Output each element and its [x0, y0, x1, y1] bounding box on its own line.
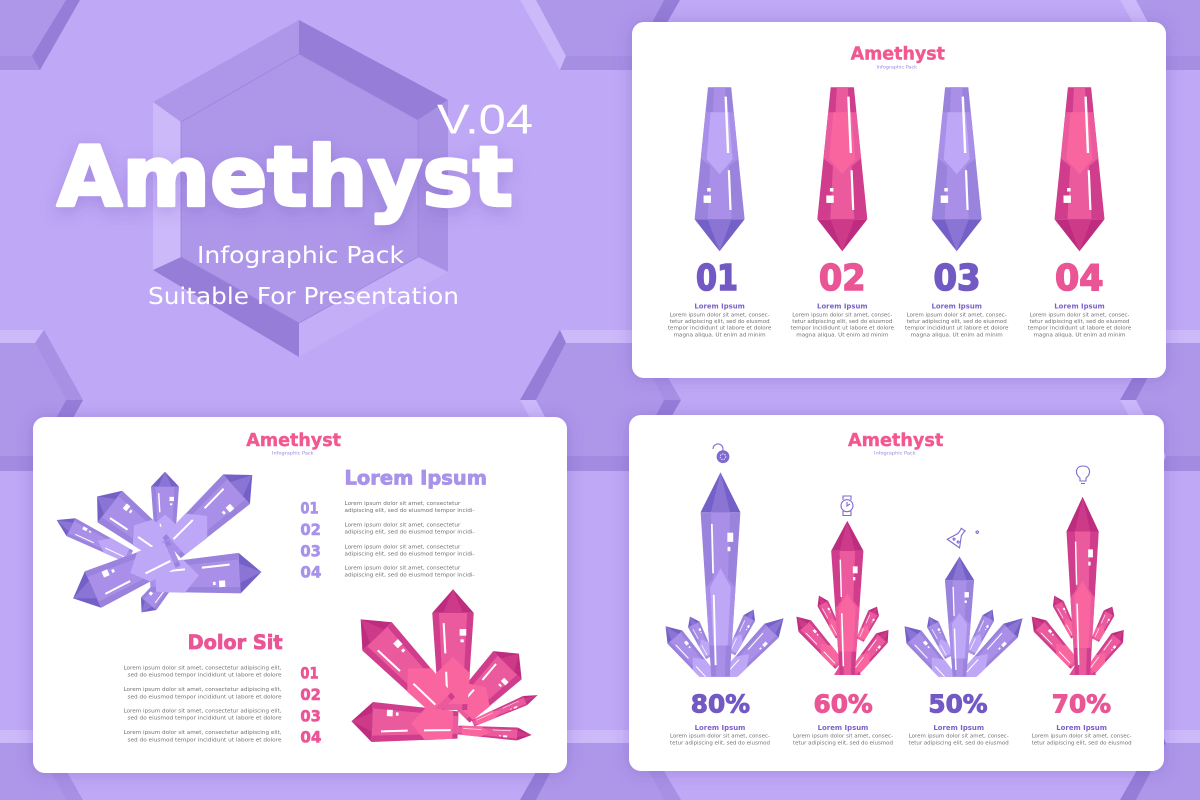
pink numbered list: Lorem ipsum dolor sit amet, consectetur adipiscing elit, [124, 687, 282, 693]
pink numbered list: Lorem ipsum dolor sit amet, consectetur adipiscing elit, [124, 709, 282, 715]
purple numbered list: adipiscing elit, sed do eiusmod tempor incidi- [344, 551, 475, 557]
purple numbered list: Lorem ipsum dolor sit amet, consectetur [344, 501, 461, 507]
pink numbered list: sed do eiusmod tempor incididunt ut labore et dolore [128, 673, 282, 679]
crystal 03 [932, 87, 982, 251]
text block 04: tetur adipiscing elit, sed do eiusmod [1030, 319, 1130, 325]
number 01: 01 [696, 258, 738, 299]
pink numbered list: Lorem ipsum dolor sit amet, consectetur adipiscing elit, [124, 666, 282, 672]
text block 03 [905, 302, 1008, 338]
icon: watch [841, 496, 853, 516]
purple numbered list: Lorem ipsum dolor sit amet, consectetur [344, 566, 461, 572]
text block 03: Lorem Ipsum [931, 302, 982, 310]
caption 60%: Lorem ipsum dolor sit amet, consec- [793, 734, 893, 740]
pink numbered list: 04 [300, 728, 321, 747]
pink numbered list: sed do eiusmod tempor incididunt ut labore et dolore [128, 716, 282, 722]
text block 01: tetur adipiscing elit, sed do eiusmod [670, 319, 770, 325]
pink crystal cluster [346, 589, 540, 745]
text block 01 [668, 302, 771, 338]
version label: V.04 [437, 96, 533, 142]
pink numbered list: Lorem ipsum dolor sit amet, consectetur adipiscing elit, [124, 730, 282, 736]
caption 70%: Lorem Ipsum [1056, 724, 1107, 732]
purple numbered list: adipiscing elit, sed do eiusmod tempor incidi- [344, 508, 475, 514]
icon: light bulb [1076, 466, 1090, 484]
crystal 02 [817, 87, 867, 251]
text block 02: magna aliqua. Ut enim ad minim [796, 332, 888, 338]
caption 80%: Lorem Ipsum [695, 724, 745, 732]
crystal cluster: 50% [904, 556, 1022, 677]
subtitle line 2: Suitable For Presentation [148, 284, 459, 310]
text block 02: tetur adipiscing elit, sed do eiusmod [792, 319, 892, 325]
text block 02: Lorem ipsum dolor sit amet, consec- [792, 312, 892, 318]
value: 80%: 80% [691, 689, 750, 718]
caption 60% [793, 724, 893, 747]
caption 50%: Lorem ipsum dolor sit amet, consec- [909, 734, 1009, 740]
purple numbered list: 01 [300, 498, 319, 517]
panel title: Amethyst [851, 44, 945, 64]
caption 70%: Lorem ipsum dolor sit amet, consec- [1032, 734, 1132, 740]
text block 04: tempor incididunt ut labore et dolore [1028, 326, 1131, 332]
panel title: Amethyst [848, 431, 943, 451]
subtitle line 1: Infographic Pack [197, 243, 405, 269]
text block 01: magna aliqua. Ut enim ad minim [674, 332, 766, 338]
panel: numbered crystals [632, 22, 1166, 378]
panel title: Amethyst [246, 431, 341, 451]
pink numbered list: 01 [300, 663, 319, 682]
text block 03: magna aliqua. Ut enim ad minim [911, 332, 1003, 338]
panel subtitle: Infographic Pack [874, 450, 916, 456]
caption 60%: Lorem Ipsum [818, 724, 868, 732]
text block 04: Lorem Ipsum [1054, 302, 1105, 310]
caption 70%: tetur adipiscing elit, sed do eiusmod [1032, 741, 1132, 747]
crystal 04 [1054, 87, 1104, 251]
heading: Dolor Sit: Dolor Sit [188, 631, 283, 654]
caption 50%: tetur adipiscing elit, sed do eiusmod [909, 741, 1009, 747]
caption 50% [909, 724, 1009, 747]
text block 04: magna aliqua. Ut enim ad minim [1034, 332, 1126, 338]
central hexagon emblem [153, 20, 448, 357]
panel: crystal clusters with lists [33, 417, 567, 773]
text block 04: Lorem ipsum dolor sit amet, consec- [1030, 312, 1130, 318]
pink numbered list: sed do eiusmod tempor incididunt ut labore et dolore [128, 737, 282, 743]
crystal 01 [695, 87, 745, 251]
number 02: 02 [819, 258, 866, 299]
value: 60%: 60% [814, 689, 873, 718]
purple numbered list: 03 [300, 542, 321, 561]
panel subtitle: Infographic Pack [272, 450, 314, 456]
icon: lock [713, 444, 729, 463]
value: 70%: 70% [1052, 689, 1111, 718]
icon: flask [947, 519, 979, 552]
purple numbered list: Lorem ipsum dolor sit amet, consectetur [344, 523, 461, 529]
caption 50%: Lorem Ipsum [933, 724, 984, 732]
purple numbered list: 02 [300, 520, 321, 539]
text block 03: Lorem ipsum dolor sit amet, consec- [907, 312, 1007, 318]
caption 60%: tetur adipiscing elit, sed do eiusmod [793, 741, 893, 747]
crystal cluster: 80% [666, 472, 784, 677]
caption 80% [670, 724, 770, 747]
caption 80%: tetur adipiscing elit, sed do eiusmod [670, 741, 770, 747]
pink numbered list: sed do eiusmod tempor incididunt ut labore et dolore [128, 694, 282, 700]
purple crystal cluster [52, 460, 266, 619]
pink numbered list [124, 663, 321, 747]
text block 04 [1028, 302, 1131, 338]
text block 01: tempor incididunt ut labore et dolore [668, 326, 771, 332]
crystal cluster: 70% [1032, 496, 1124, 675]
text block 02: Lorem Ipsum [817, 302, 868, 310]
heading: Lorem Ipsum: Lorem Ipsum [344, 466, 487, 489]
number 03: 03 [934, 258, 980, 299]
purple numbered list: adipiscing elit, sed do eiusmod tempor incidi- [344, 530, 475, 536]
main title: Amethyst: Amethyst [57, 128, 513, 226]
value: 50%: 50% [928, 689, 988, 718]
text block 01: Lorem Ipsum [694, 302, 745, 310]
text block 02: tempor incididunt ut labore et dolore [791, 326, 894, 332]
pink numbered list: 03 [300, 706, 321, 725]
purple numbered list [300, 498, 475, 582]
caption 80%: Lorem ipsum dolor sit amet, consec- [670, 734, 770, 740]
text block 03: tempor incididunt ut labore et dolore [905, 326, 1008, 332]
panel subtitle: Infographic Pack [876, 64, 917, 70]
text block 01: Lorem ipsum dolor sit amet, consec- [670, 312, 770, 318]
number 04: 04 [1055, 258, 1104, 299]
pink numbered list: 02 [300, 685, 321, 704]
crystal cluster: 60% [796, 520, 888, 675]
caption 70% [1032, 724, 1132, 747]
panel: percentage crystals [629, 415, 1164, 771]
text block 02 [791, 302, 894, 338]
purple numbered list: 04 [300, 563, 321, 582]
purple numbered list: adipiscing elit, sed do eiusmod tempor incidi- [344, 573, 475, 579]
purple numbered list: Lorem ipsum dolor sit amet, consectetur [344, 544, 461, 550]
text block 03: tetur adipiscing elit, sed do eiusmod [907, 319, 1007, 325]
